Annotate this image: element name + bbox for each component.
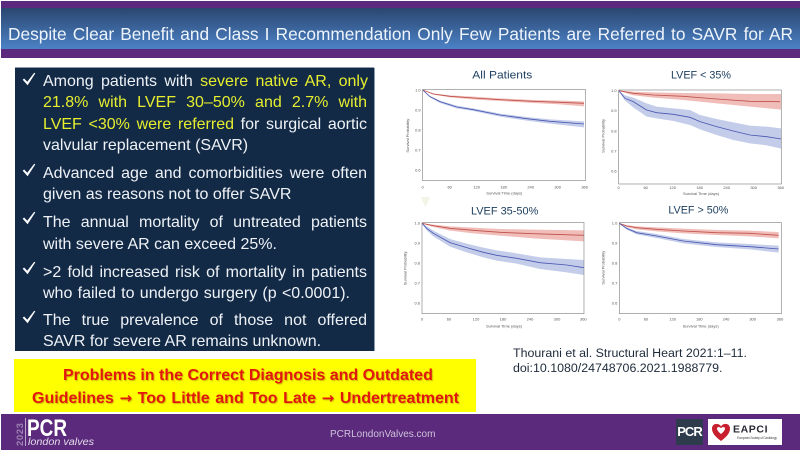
footer xyxy=(1,414,800,450)
chart: LVEF 35-50%: Survival Time (days) xyxy=(486,323,523,328)
chart: LVEF > 50% xyxy=(601,204,784,328)
logo: PCR: PCR xyxy=(677,424,702,439)
chart: LVEF > 50%: 60 xyxy=(644,317,649,322)
chart: All Patients: 120 xyxy=(473,184,481,189)
chart: LVEF 35-50%: 0 xyxy=(421,317,424,322)
chart: All Patients: 0.6 xyxy=(415,168,421,173)
header band xyxy=(1,1,800,58)
bullet: annual mortality: The annual mortality of untreated patients xyxy=(43,214,367,231)
chart: LVEF < 35%: 0.7 xyxy=(611,148,617,153)
chart: All Patients: 0.7 xyxy=(415,148,421,153)
logo: PCR London Valves: 2023 xyxy=(15,422,26,446)
bullet: increased risk: who failed to undergo surgery (p <0.0001). xyxy=(43,285,350,302)
citation: doi:10.1080/24748706.2021.1988779. xyxy=(513,361,722,375)
chart: LVEF < 35%: Survival Probability xyxy=(601,119,606,153)
logo: EAPCI: European Society of Cardiology xyxy=(737,436,777,440)
chart: LVEF < 35%: 0.8 xyxy=(611,128,617,133)
chart: LVEF > 50%: 360 xyxy=(777,317,784,322)
chart: LVEF < 35%: LVEF < 35% xyxy=(671,69,731,81)
title xyxy=(1,8,800,49)
bullet: referral rates: LVEF <30% were referred for surgical aortic xyxy=(43,116,367,133)
chart: LVEF < 35%: 1.0 xyxy=(611,88,617,93)
chart: All Patients: 1.0 xyxy=(415,87,421,92)
title: Despite Clear Benefit and Class I Recommendation Only Few Patients are Referred to SAVR for AR xyxy=(8,24,793,44)
bullet: true prevalence: SAVR for severe AR remains unknown. xyxy=(43,333,321,350)
logo: PCR London Valves xyxy=(15,416,94,448)
chart: LVEF < 35%: 0 xyxy=(618,185,621,190)
chart: LVEF < 35%: 0.6 xyxy=(611,168,617,173)
citation xyxy=(513,346,747,375)
callout: conclusion xyxy=(14,359,476,412)
chart: LVEF > 50%: 1.0 xyxy=(612,221,618,226)
logo: EAPCI: EAPCI xyxy=(733,424,768,436)
bullet: referral rates xyxy=(22,72,368,154)
chart: LVEF > 50%: 240 xyxy=(723,317,730,322)
chart: All Patients: 0 xyxy=(422,184,425,189)
logo: PCR xyxy=(676,419,703,445)
citation: Thourani et al. Structural Heart 2021:1–11. xyxy=(513,346,747,360)
chart: All Patients xyxy=(405,69,589,196)
bullet: true prevalence xyxy=(22,310,367,350)
chart: LVEF 35-50%: 180 xyxy=(500,317,507,322)
bullet: referral rates: 21.8% with LVEF 30–50% and 2.7% with xyxy=(43,94,367,111)
chart: LVEF 35-50%: 60 xyxy=(447,317,452,322)
logo: PCR London Valves: london valves xyxy=(28,437,94,448)
chart: LVEF > 50%: 0.9 xyxy=(612,241,618,246)
bullet: increased risk xyxy=(22,262,367,302)
chart: LVEF 35-50%: 0.7 xyxy=(414,281,421,286)
bullet: reasons not to offer: given as reasons not to offer SAVR xyxy=(43,186,291,203)
panel: key findings xyxy=(15,68,374,351)
bullet: annual mortality xyxy=(22,212,367,253)
chart: LVEF < 35%: 120 xyxy=(669,185,677,190)
chart: LVEF 35-50%: 300 xyxy=(554,317,561,322)
chart: LVEF > 50%: 0.8 xyxy=(612,261,618,266)
chart: LVEF 35-50%: LVEF 35-50% xyxy=(471,205,539,217)
chart: LVEF < 35%: 300 xyxy=(750,185,758,190)
chart: LVEF < 35%: 60 xyxy=(643,185,649,190)
chart: LVEF 35-50%: 0.8 xyxy=(414,261,421,266)
chart: LVEF 35-50% xyxy=(403,205,587,328)
bullet: referral rates: Among patients with severe native AR, only xyxy=(43,73,368,90)
bullet: increased risk: >2 fold increased risk of mortality in patients xyxy=(43,264,367,281)
chart: LVEF < 35%: 360 xyxy=(777,185,785,190)
chart: LVEF 35-50%: Survival Probability xyxy=(403,251,408,285)
chart: LVEF < 35%: 180 xyxy=(696,185,704,190)
chart: LVEF < 35% xyxy=(601,69,785,196)
chart: All Patients: 300 xyxy=(554,184,562,189)
chart: All Patients: 240 xyxy=(527,184,535,189)
chart: All Patients: Survival Time (days) xyxy=(486,191,523,196)
chart: LVEF > 50%: Survival Time (days) xyxy=(683,323,719,328)
chart: All Patients: 180 xyxy=(500,184,508,189)
bullet: reasons not to offer: Advanced age and comorbidities were often xyxy=(43,165,367,182)
callout: conclusion: Problems in the Correct Diagnosis and Outdated xyxy=(63,367,433,384)
chart: LVEF > 50%: Survival Probability xyxy=(601,251,606,285)
chart: LVEF 35-50%: 1.0 xyxy=(414,221,421,226)
logo: EAPCI xyxy=(708,419,782,445)
chart: LVEF > 50%: 180 xyxy=(696,317,703,322)
chart: All Patients: 360 xyxy=(581,184,589,189)
chart: LVEF > 50%: 120 xyxy=(669,317,677,322)
website: PCRLondonValves.com xyxy=(330,429,435,440)
chart: All Patients: 0.9 xyxy=(415,107,421,112)
chart: All Patients: All Patients xyxy=(472,69,533,81)
chart: All Patients: 0.8 xyxy=(415,127,421,132)
chart: All Patients: 60 xyxy=(447,184,453,189)
callout: conclusion: Guidelines → Too Little and Too Late → Undertreatment xyxy=(32,389,459,407)
bullet: true prevalence: The true prevalence of those not offered xyxy=(43,312,367,329)
chart: LVEF > 50%: 300 xyxy=(749,317,757,322)
bullet: referral rates: valvular replacement (SAVR) xyxy=(43,137,248,154)
chart: LVEF 35-50%: 0.6 xyxy=(414,301,421,306)
chart: LVEF 35-50%: 0.9 xyxy=(414,241,421,246)
bullet: reasons not to offer xyxy=(22,164,367,203)
chart: LVEF < 35%: Survival Time (days) xyxy=(683,191,720,196)
chart: All Patients: Survival Probability xyxy=(405,119,410,153)
bullet: annual mortality: with severe AR can exceed 25%. xyxy=(43,236,277,253)
chart: LVEF 35-50%: 120 xyxy=(473,317,480,322)
chart: LVEF > 50%: 0.6 xyxy=(612,301,618,306)
chart: LVEF < 35%: 0.9 xyxy=(611,108,617,113)
chart: LVEF > 50%: LVEF > 50% xyxy=(668,204,729,216)
chart: LVEF < 35%: 240 xyxy=(723,185,731,190)
chart: LVEF > 50%: 0.7 xyxy=(612,280,618,285)
chart: LVEF 35-50%: 360 xyxy=(580,317,587,322)
icon: faint marker xyxy=(421,197,430,207)
chart: LVEF > 50%: 0 xyxy=(618,317,621,322)
chart: LVEF 35-50%: 240 xyxy=(527,317,534,322)
